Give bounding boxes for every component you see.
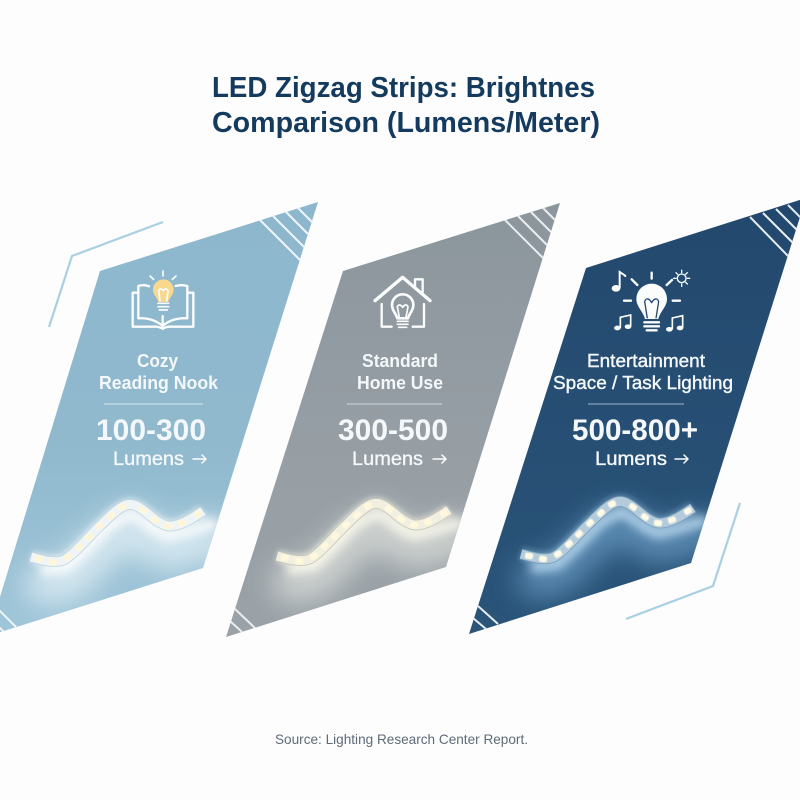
panel: standard home use: [226, 203, 560, 637]
text: category: [553, 350, 733, 393]
source note: Source: Lighting Research Center Report.: [275, 731, 528, 747]
text: category: Entertainment: [587, 350, 705, 371]
sun: [674, 270, 690, 286]
text: unit: Lumens: [595, 448, 667, 470]
text: value: 300-500: [338, 414, 448, 447]
accent line: top left: [49, 222, 163, 327]
icon: bulb with music notes and sun: [612, 270, 690, 332]
text: category: Home Use: [357, 372, 443, 393]
music notes: [612, 272, 683, 332]
text: category: [357, 350, 443, 393]
icon: house with light bulb: [375, 277, 430, 327]
text: unit: Lumens: [352, 448, 423, 470]
text: category: Standard: [362, 350, 438, 371]
accent line: bottom right: [626, 503, 740, 619]
panel 3 strip glow: [521, 501, 702, 579]
title: Comparison (Lumens/Meter): [212, 107, 600, 139]
panel 1 hatch marks: [0, 208, 313, 633]
arrow: [433, 455, 446, 463]
text: category: Space / Task Lighting: [553, 372, 733, 393]
text: category: Reading Nook: [99, 372, 219, 393]
panel 2 strip glow: [277, 503, 458, 583]
icon: book with light bulb: [133, 271, 193, 329]
text: category: [99, 350, 219, 393]
arrow: [675, 455, 688, 463]
panel 2 hatch marks: [230, 208, 558, 632]
panel: entertainment space: [469, 198, 800, 634]
text: value: 100-300: [96, 414, 206, 447]
panel 2 LED strip: [277, 502, 449, 565]
text: value: 500-800+: [572, 414, 698, 447]
text: category: Cozy: [137, 350, 179, 371]
title: [212, 72, 600, 139]
panel 1 LED strip: [31, 503, 203, 566]
arrow: [193, 455, 206, 463]
panel 1 strip glow: [31, 504, 212, 584]
panel 3 LED strip: [521, 500, 693, 563]
text: unit: Lumens: [113, 448, 184, 470]
panel 3 hatch marks: [473, 205, 800, 629]
title: LED Zigzag Strips: Brightnes: [212, 72, 595, 104]
panel: cozy reading nook: [0, 202, 318, 636]
